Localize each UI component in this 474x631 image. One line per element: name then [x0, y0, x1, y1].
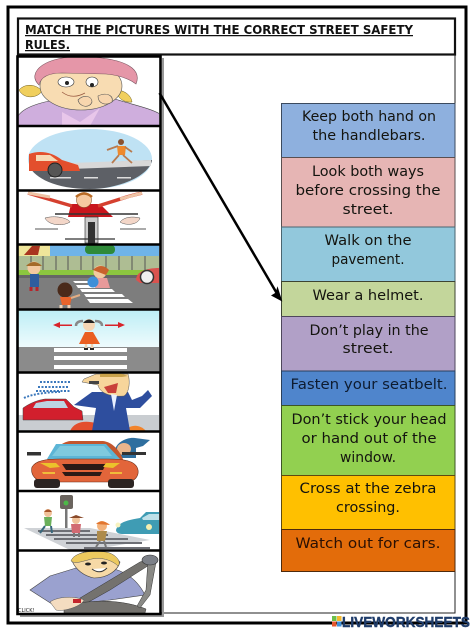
card: Don't stick your head or hand out of the window: [282, 406, 455, 476]
card: Don't play in the street: street.: [342, 341, 394, 357]
picture: cyclist with both hands off the handlebars: [28, 192, 146, 244]
card: Walk on the pavement: Walk on the: [324, 233, 412, 249]
picture: children playing on the street: [18, 245, 159, 309]
picture: pedestrian walking on the pavement beside a car: [28, 129, 152, 189]
picture: man fastening his seatbelt: [18, 551, 158, 614]
card: Look both ways before crossing the street: street.: [342, 202, 394, 218]
card: Don't stick your head or hand out of the window: Don’t stick your head: [292, 412, 446, 428]
card: Look both ways before crossing the street: Look both ways: [312, 164, 424, 180]
picture: man on the phone not watching out for a car: [18, 372, 159, 431]
rule cards: [282, 104, 455, 572]
card: Keep both hand on the handlebars: the handlebars.: [312, 128, 426, 144]
card: Wear a helmet: [282, 282, 455, 316]
card: Walk on the pavement: [282, 227, 455, 282]
picture: child wearing a pink helmet: [18, 56, 160, 126]
picture: driver leaning out of the car window: [27, 438, 150, 488]
card: Walk on the pavement: pavement.: [332, 252, 404, 268]
card: Keep both hand on the handlebars: Keep both hand on: [302, 109, 436, 125]
card: Look both ways before crossing the street: before crossing the: [296, 183, 441, 199]
card: Look both ways before crossing the street: [282, 158, 455, 227]
card: Watch out for cars: [282, 530, 455, 572]
card: Don't play in the street: [282, 316, 455, 371]
title text: MATCH THE PICTURES WITH THE CORRECT STREET SAFETY: [25, 22, 414, 37]
picture: man fastening his seatbelt: CLICK!: [18, 608, 35, 614]
picture cell borders: [18, 56, 160, 614]
card: Cross at the zebra crossing: [282, 476, 455, 530]
arrow from helmet picture to Wear a helmet: [160, 93, 282, 300]
card: Fasten your seatbelt: [282, 371, 455, 406]
picture: children at a zebra crossing with traffic light: [24, 495, 159, 550]
card: Don't play in the street: Don’t play in the: [310, 323, 429, 339]
card: Keep both hand on the handlebars: [282, 104, 455, 158]
title box: [18, 18, 455, 54]
title text: [25, 22, 414, 52]
picture column: [18, 56, 164, 617]
card: Cross at the zebra crossing: crossing.: [336, 500, 400, 516]
title text: RULES.: [25, 37, 70, 52]
card: Don't stick your head or hand out of the window: window.: [340, 450, 396, 466]
card: Fasten your seatbelt: Fasten your seatbelt.: [290, 377, 448, 393]
card: Watch out for cars: Watch out for cars.: [296, 536, 440, 552]
card: Wear a helmet: Wear a helmet.: [312, 288, 424, 304]
card: Don't stick your head or hand out of the window: or hand out of the: [302, 431, 437, 447]
picture: girl looking both ways at a zebra crossing: [18, 310, 159, 372]
card: Cross at the zebra crossing: Cross at the zebra: [300, 481, 436, 497]
thin frame of the matching area: [160, 55, 455, 613]
